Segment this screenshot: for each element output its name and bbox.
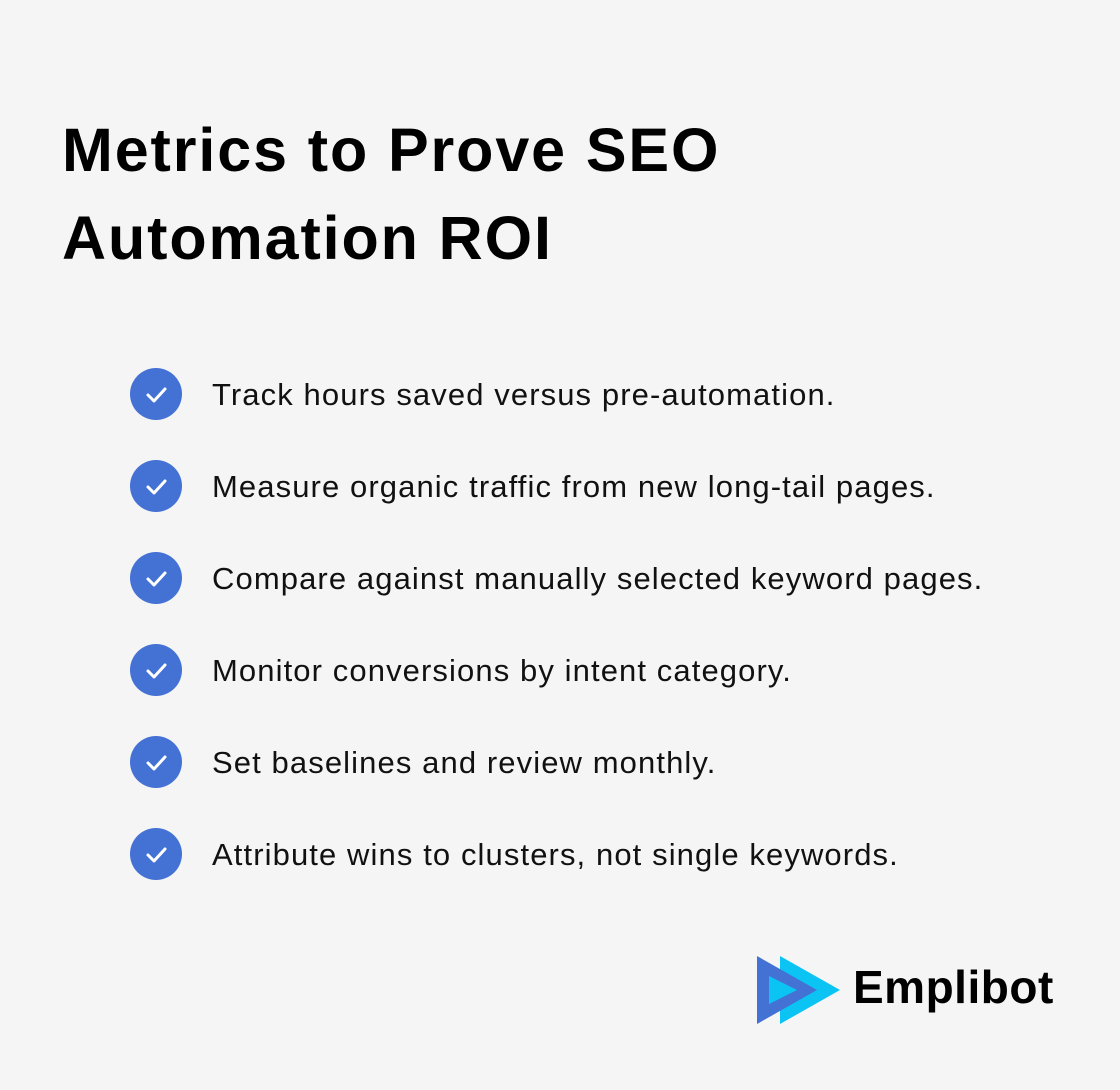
title: Automation ROI — [62, 204, 553, 272]
item 4: Monitor conversions by intent category. — [212, 653, 792, 688]
item 4 — [130, 644, 792, 696]
item 1: Track hours saved versus pre-automation. — [212, 377, 836, 412]
item 3: Compare against manually selected keyword pages. — [212, 561, 983, 596]
item 6: Attribute wins to clusters, not single keywords. — [212, 837, 899, 872]
title: Metrics to Prove SEO — [62, 116, 720, 184]
logo: Emplibot: Emplibot — [853, 961, 1054, 1013]
logo: Emplibot — [757, 956, 1054, 1024]
checklist — [130, 368, 983, 880]
item 6 — [130, 828, 899, 880]
item 5: Set baselines and review monthly. — [212, 745, 716, 780]
item 3 — [130, 552, 983, 604]
item 5 — [130, 736, 716, 788]
item 2: Measure organic traffic from new long-tail pages. — [212, 469, 936, 504]
item 1 — [130, 368, 836, 420]
item 2 — [130, 460, 936, 512]
title — [62, 116, 720, 272]
